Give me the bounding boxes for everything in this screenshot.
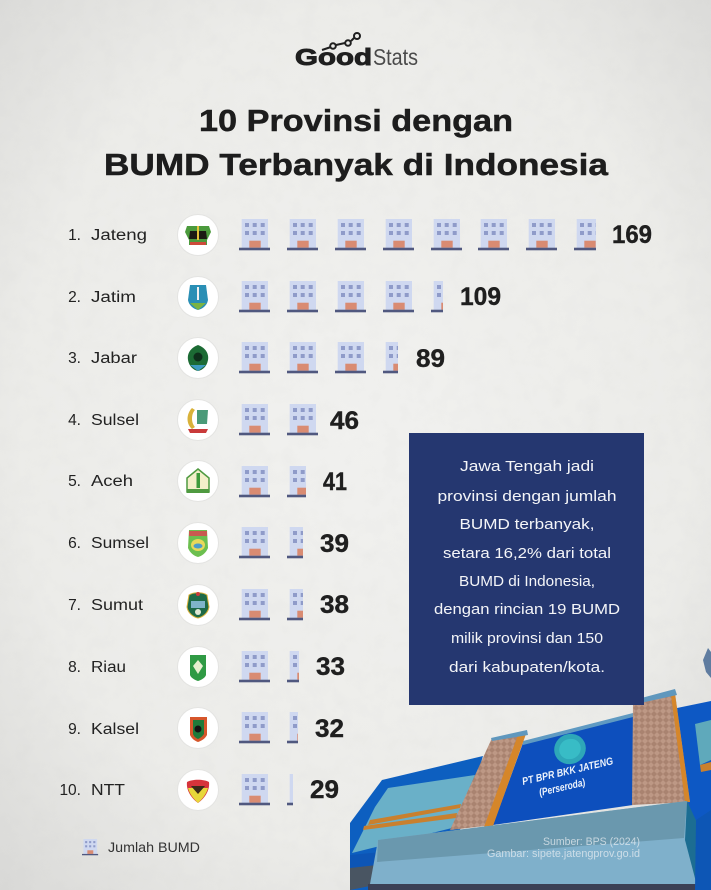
source: Gambar: sipete.jatengprov.go.id [487,848,640,860]
title: BUMD Terbanyak di Indonesia [104,147,609,182]
callout: setara 16,2% dari total [443,546,611,562]
row 4: Sulsel [68,400,359,440]
row 9: Kalsel: 9. [68,721,81,738]
legend: Jumlah BUMD [108,840,200,855]
row 5: Aceh [68,460,347,502]
icon: emblem Sumsel [178,522,218,564]
row 7: Sumut: 7. [68,597,81,614]
row 8: Riau [68,646,345,688]
canopy [368,801,711,890]
row 10: NTT: 29 [310,776,339,804]
sign text: PT BPR BKK JATENG [521,755,614,788]
icon: trend line [322,33,360,50]
row 10: NTT: 10. [59,782,81,799]
source: Sumber: BPS (2024) [543,836,640,848]
row 9: Kalsel: 32 [315,715,344,743]
photo: BPR BKK Jateng building [350,648,711,890]
row 8: Riau: 33 [316,653,345,681]
legend [82,839,200,855]
callout [409,433,644,705]
icon: emblem Sulsel [178,400,218,440]
row 1: Jateng: 169 [612,221,652,249]
row 5: Aceh: 41 [323,468,347,496]
callout: BUMD di Indonesia, [459,574,595,590]
row 6: Sumsel [68,522,349,564]
row 9: Kalsel: Kalsel [91,721,139,738]
icon: emblem NTT [178,770,218,810]
row 3: Jabar: 3. [68,350,81,367]
icon: emblem Riau [178,646,218,688]
pillar left [450,730,528,830]
row 2: Jatim [68,276,501,318]
row 6: Sumsel: 39 [320,530,349,558]
row 10: NTT [59,770,339,810]
row 4: Sulsel: 4. [68,412,81,429]
logo: GoodStats: Good [295,44,372,70]
row 1: Jateng [68,214,652,256]
logo: GoodStats [295,33,418,70]
logo: GoodStats: Stats [373,44,418,70]
row 2: Jatim: 2. [68,289,81,306]
sign text: (Perseroda) [538,777,587,799]
icon: emblem Jateng [178,214,218,256]
callout: dari kabupaten/kota. [449,660,605,676]
title [104,103,609,182]
callout: dengan rincian 19 BUMD [434,602,620,618]
callout: Jawa Tengah jadi [460,459,594,475]
row 1: Jateng: 1. [68,227,81,244]
callout: BUMD terbanyak, [460,517,594,533]
row 8: Riau: 8. [68,659,81,676]
row 6: Sumsel: Sumsel [91,535,149,552]
row 3: Jabar: Jabar [91,350,137,367]
row 9: Kalsel [68,708,344,748]
row 7: Sumut: Sumut [91,597,144,614]
icon: emblem Aceh [178,460,218,502]
row 8: Riau: Riau [91,659,126,676]
icon: emblem Jabar [178,338,218,378]
row 2: Jatim: Jatim [91,289,136,306]
row 6: Sumsel: 6. [68,535,81,552]
row 7: Sumut: 38 [320,591,349,619]
source [487,836,640,860]
row 1: Jateng: Jateng [91,227,147,244]
row 2: Jatim: 109 [460,283,501,311]
icon: emblem Sumut [178,584,218,626]
row 5: Aceh: Aceh [91,473,133,490]
callout: milik provinsi dan 150 [451,631,603,647]
logo on facade [549,729,591,769]
icon: emblem Jatim [178,276,218,318]
row 4: Sulsel: Sulsel [91,412,139,429]
sign text [521,755,614,799]
row 5: Aceh: 5. [68,473,81,490]
row 3: Jabar: 89 [416,345,445,373]
icon: emblem Kalsel [178,708,218,748]
row 3: Jabar [68,338,445,378]
title: 10 Provinsi dengan [199,103,513,138]
row 10: NTT: NTT [91,782,126,799]
row 7: Sumut [68,584,349,626]
pillar right [630,689,690,805]
row 4: Sulsel: 46 [330,407,359,435]
callout: provinsi dengan jumlah [438,489,616,505]
